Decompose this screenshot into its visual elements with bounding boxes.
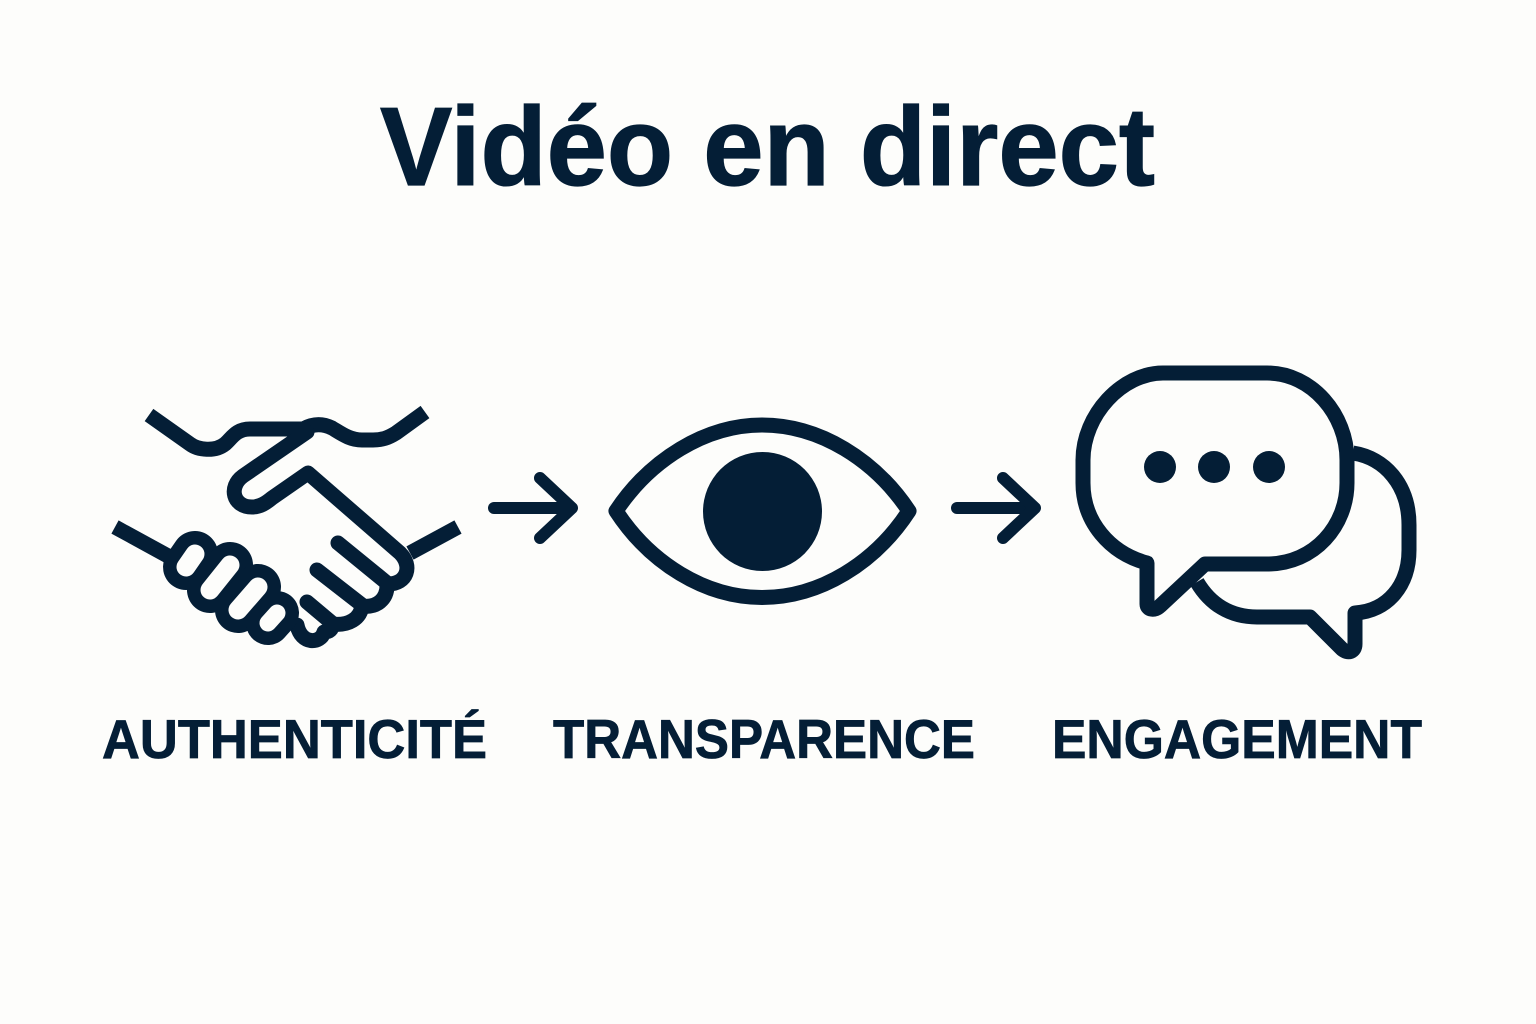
arrow: transparency to engagement (957, 478, 1035, 538)
icon: handshake (115, 412, 458, 641)
icon: speech bubbles (1083, 373, 1409, 652)
icon: eye (616, 425, 909, 598)
title: Vidéo en direct (380, 85, 1155, 209)
label: authenticité: AUTHENTICITÉ (102, 708, 487, 770)
left fist (186, 554, 277, 623)
label: engagement: ENGAGEMENT (1052, 708, 1422, 770)
typing dots (1144, 451, 1285, 483)
arrow: authenticity to transparency (494, 478, 572, 538)
label: transparence: TRANSPARENCE (553, 708, 975, 770)
